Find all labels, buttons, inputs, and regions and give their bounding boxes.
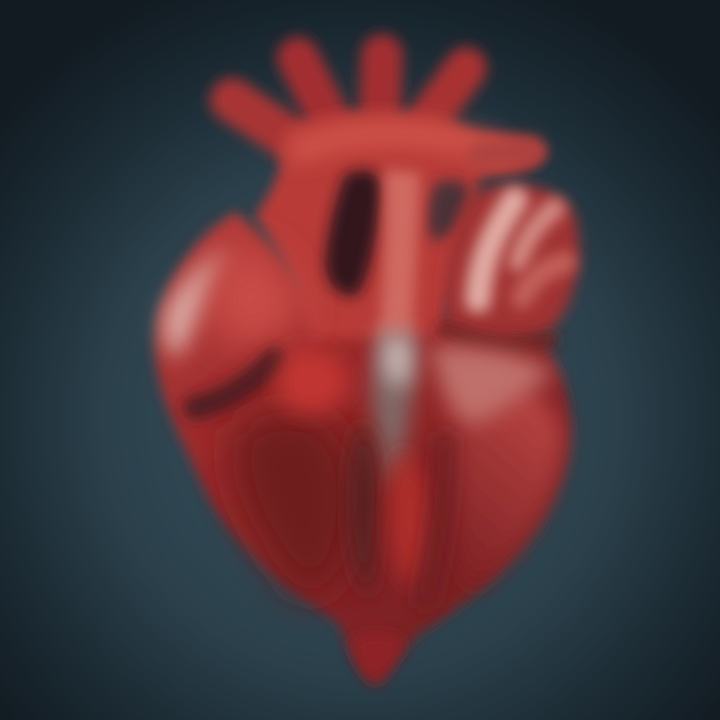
- vessel stub upper right: [480, 150, 532, 155]
- lower dark shadow left: [232, 410, 356, 597]
- center red mass: [278, 349, 350, 414]
- pale stripe 1: [478, 200, 515, 300]
- lower center red: [391, 450, 430, 590]
- vessel prong 1: [232, 100, 295, 142]
- dark coronary left: [195, 360, 275, 408]
- heart: [156, 55, 579, 684]
- vessel prong 2: [298, 58, 332, 125]
- dark opening right: [428, 180, 470, 240]
- left chamber highlight: [163, 250, 228, 360]
- vessel prong 4: [428, 68, 466, 120]
- central grey vein: [373, 335, 415, 490]
- pale stripe 3: [522, 262, 565, 298]
- upper left ventricle glow: [210, 246, 305, 345]
- bottom tip: [350, 633, 405, 684]
- pale stripe 2: [518, 208, 555, 262]
- arch highlight: [300, 134, 500, 152]
- central lower dark vein: [349, 420, 378, 600]
- right pale area: [430, 345, 555, 425]
- central pale pillar: [378, 170, 420, 340]
- vessel prong 3: [380, 55, 382, 115]
- central white patch: [382, 335, 412, 385]
- upper vessel trunk: [255, 111, 546, 340]
- right atrium lobes: [444, 185, 579, 340]
- right ventricle: [446, 377, 562, 590]
- dark band below right atrium: [445, 330, 550, 345]
- dark opening left: [325, 170, 382, 296]
- dark vein lower right: [425, 440, 445, 600]
- heart body: [156, 212, 571, 684]
